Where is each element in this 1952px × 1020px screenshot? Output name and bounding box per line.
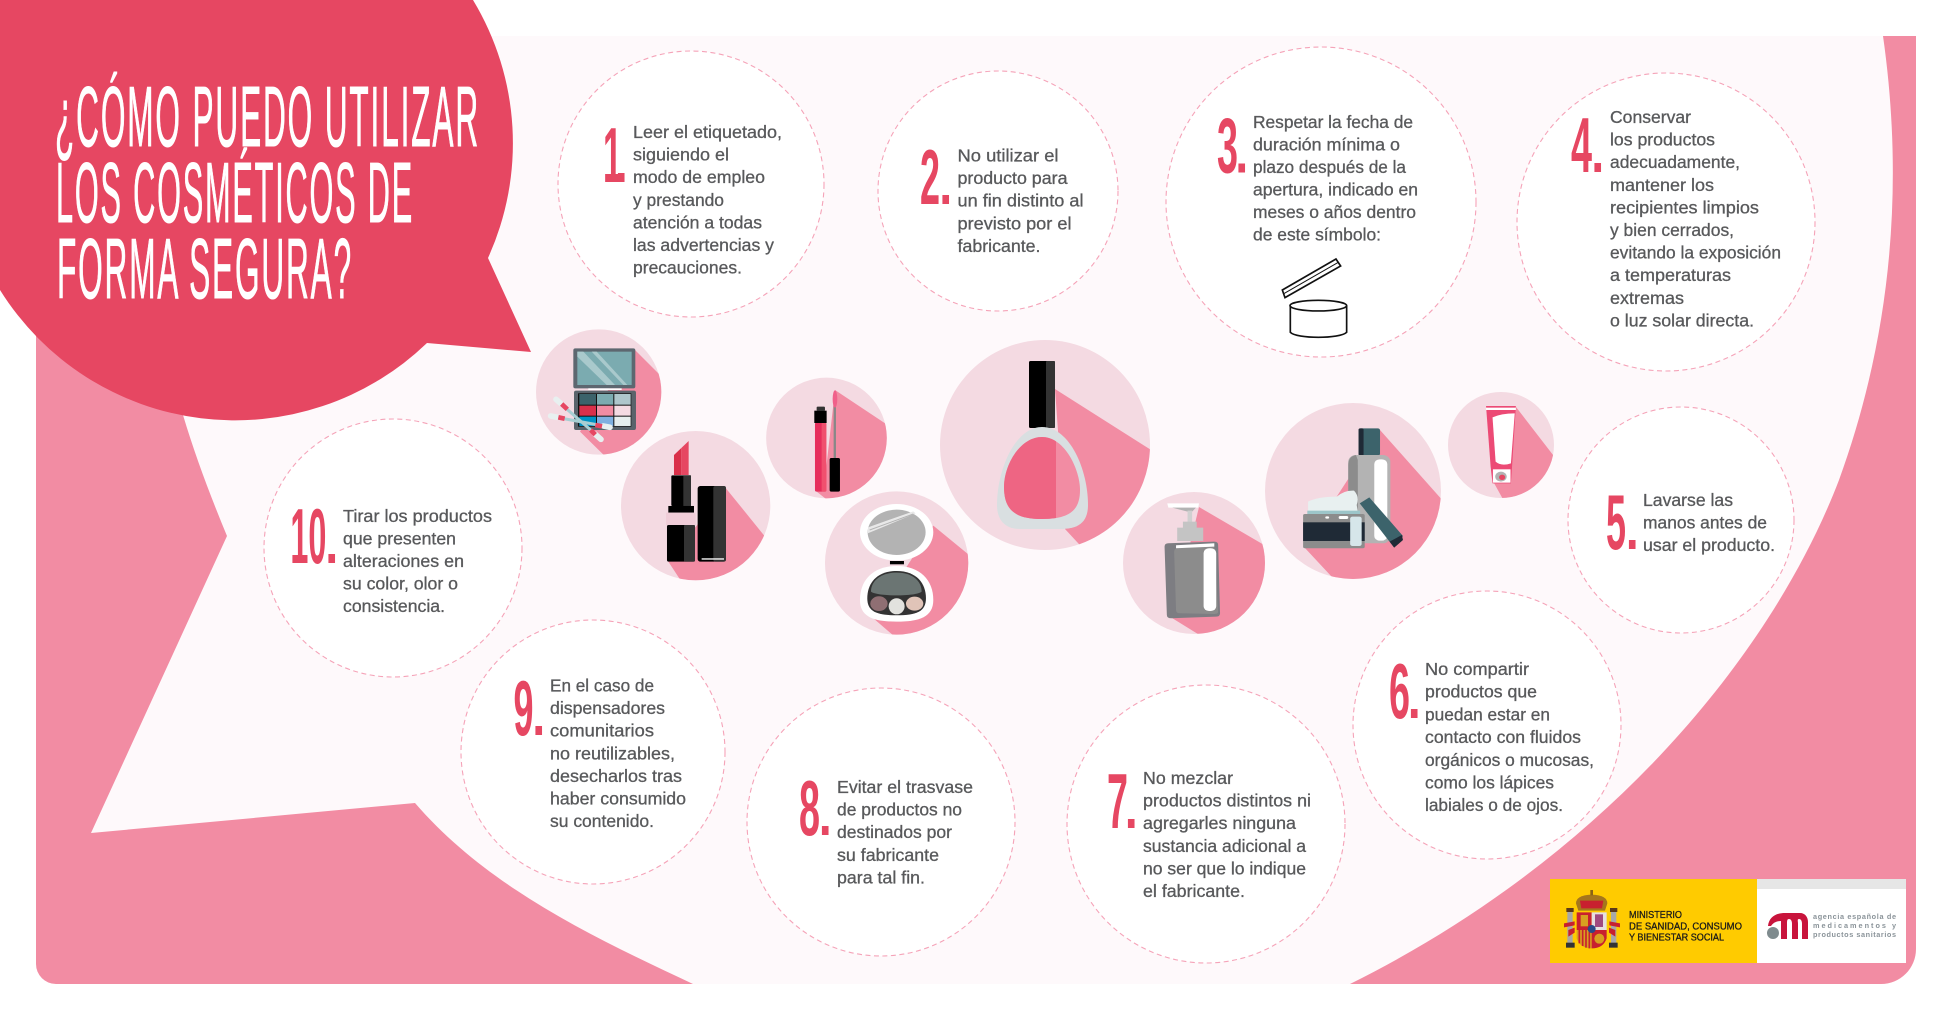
text 2: producto para	[958, 168, 1068, 188]
step 4	[1517, 73, 1815, 371]
number 1: 1	[603, 111, 622, 199]
text 4: mantener los	[1610, 175, 1714, 195]
text 3: duración mínima o	[1253, 134, 1400, 154]
text 3: de este símbolo:	[1253, 224, 1381, 244]
number 10: .	[325, 509, 338, 576]
text 4: y bien cerrados,	[1610, 220, 1734, 240]
text 4: evitando la exposición	[1610, 243, 1781, 263]
text 2: previsto por el	[958, 213, 1072, 233]
text 1: precauciones.	[633, 258, 742, 278]
text: LOS COSMÉTICOS DE	[56, 146, 414, 241]
text 6: No compartir	[1425, 659, 1529, 679]
step 8	[747, 688, 1015, 956]
text 3: meses o años dentro	[1253, 202, 1416, 222]
text 8: para tal fin.	[837, 867, 925, 887]
text 4: recipientes limpios	[1610, 197, 1759, 217]
number 2: 2	[920, 133, 940, 221]
text 9: dispensadores	[550, 698, 665, 718]
agency name: agencia española de	[1813, 912, 1896, 921]
icon: pump bottle	[1123, 492, 1265, 634]
text 7: No mezclar	[1143, 768, 1233, 788]
text 1: modo de empleo	[633, 167, 765, 187]
number 5: .	[1626, 495, 1639, 562]
number 9: 9	[514, 664, 534, 752]
icon: period after opening symbol	[1282, 259, 1347, 337]
text 9: su contenido.	[550, 811, 654, 831]
number 3: 3	[1217, 102, 1238, 190]
number 4: 4	[1571, 101, 1592, 189]
text 4: o luz solar directa.	[1610, 310, 1754, 330]
number 9: .	[532, 681, 545, 748]
title: FORMA SEGURA?	[57, 222, 353, 317]
step 9	[461, 620, 725, 884]
agency name: medicamentos y	[1813, 921, 1897, 930]
icon: cream and bottle	[1265, 403, 1441, 579]
ministry name: DE SANIDAD, CONSUMO	[1629, 920, 1742, 932]
step 6	[1353, 591, 1621, 859]
text 3: apertura, indicado en	[1253, 180, 1418, 200]
step 10	[264, 419, 522, 677]
number 7: 7	[1107, 757, 1128, 845]
icon: eyeshadow palette	[536, 330, 662, 454]
icon: compact	[825, 492, 968, 635]
text 6: contacto con fluidos	[1425, 727, 1581, 747]
text 10: Tirar los productos	[343, 506, 492, 526]
text 9: comunitarios	[550, 721, 654, 741]
text 6: como los lápices	[1425, 772, 1554, 792]
text 8: su fabricante	[837, 845, 939, 865]
step 2	[878, 71, 1118, 311]
logo: ministerio	[1550, 879, 1757, 963]
text 1: Leer el etiquetado,	[633, 122, 782, 142]
step 3	[1166, 47, 1476, 357]
text 9: desecharlos tras	[550, 766, 682, 786]
text 1: las advertencias y	[633, 235, 774, 255]
text 1: siguiendo el	[633, 145, 729, 165]
number 5: 5	[1606, 478, 1626, 566]
text 10: que presenten	[343, 528, 456, 548]
text 7: sustancia adicional a	[1143, 836, 1306, 856]
ministry name: Y BIENESTAR SOCIAL	[1629, 931, 1724, 943]
text 10: consistencia.	[343, 596, 445, 616]
text 10: su color, olor o	[343, 574, 458, 594]
number 4: .	[1591, 118, 1604, 185]
logo: aemps	[1757, 879, 1906, 963]
icon: coat of arms	[1564, 890, 1620, 948]
number 8: 8	[799, 764, 820, 852]
number 3: .	[1235, 118, 1248, 186]
text 7: agregarles ninguna	[1143, 813, 1296, 833]
text 2: fabricante.	[958, 236, 1040, 256]
text 8: destinados por	[837, 822, 952, 842]
icon: am mark	[1767, 913, 1808, 939]
text 8: de productos no	[837, 800, 962, 820]
text: ¿CÓMO PUEDO UTILIZAR	[55, 70, 480, 165]
text 6: puedan estar en	[1425, 704, 1550, 724]
text 4: a temperaturas	[1610, 265, 1731, 285]
text 6: productos que	[1425, 682, 1537, 702]
number 8: .	[819, 781, 832, 848]
text 2: un fin distinto al	[958, 191, 1084, 211]
text 9: En el caso de	[550, 676, 654, 696]
text 4: Conservar	[1610, 107, 1691, 127]
text 3: plazo después de la	[1253, 157, 1406, 177]
text 5: usar el producto.	[1643, 535, 1775, 555]
text 7: no ser que lo indique	[1143, 858, 1306, 878]
text 5: manos antes de	[1643, 512, 1767, 532]
text 9: haber consumido	[550, 788, 686, 808]
step 7	[1067, 685, 1345, 963]
agency name: productos sanitarios	[1813, 930, 1896, 939]
text 2: No utilizar el	[958, 146, 1058, 166]
text 5: Lavarse las	[1643, 490, 1733, 510]
text 9: no reutilizables,	[550, 743, 675, 763]
text 1: atención a todas	[633, 212, 762, 232]
text 4: adecuadamente,	[1610, 152, 1740, 172]
icon: lip gloss	[766, 378, 887, 498]
text 7: el fabricante.	[1143, 881, 1245, 901]
text 6: orgánicos o mucosas,	[1425, 750, 1594, 770]
number 6: 6	[1389, 647, 1410, 735]
text 10: alteraciones en	[343, 551, 464, 571]
text 6: labiales o de ojos.	[1425, 795, 1563, 815]
icon: nail polish	[940, 340, 1150, 550]
title bubble	[0, 0, 531, 420]
number 6: .	[1408, 664, 1421, 731]
step 5	[1568, 407, 1794, 633]
ministry name: MINISTERIO	[1629, 909, 1682, 921]
text 3: Respetar la fecha de	[1253, 112, 1413, 132]
icon: cream tube	[1448, 392, 1554, 498]
number 2: .	[939, 150, 952, 217]
step 1	[558, 51, 824, 317]
number 10: 10	[290, 492, 326, 580]
number 7: .	[1125, 774, 1138, 841]
text 4: extremas	[1610, 288, 1684, 308]
number 1: .	[615, 128, 628, 195]
icon: lipstick	[621, 431, 770, 580]
text 4: los productos	[1610, 130, 1715, 150]
text 1: y prestando	[633, 190, 724, 210]
text 7: productos distintos ni	[1143, 791, 1311, 811]
text 8: Evitar el trasvase	[837, 777, 973, 797]
